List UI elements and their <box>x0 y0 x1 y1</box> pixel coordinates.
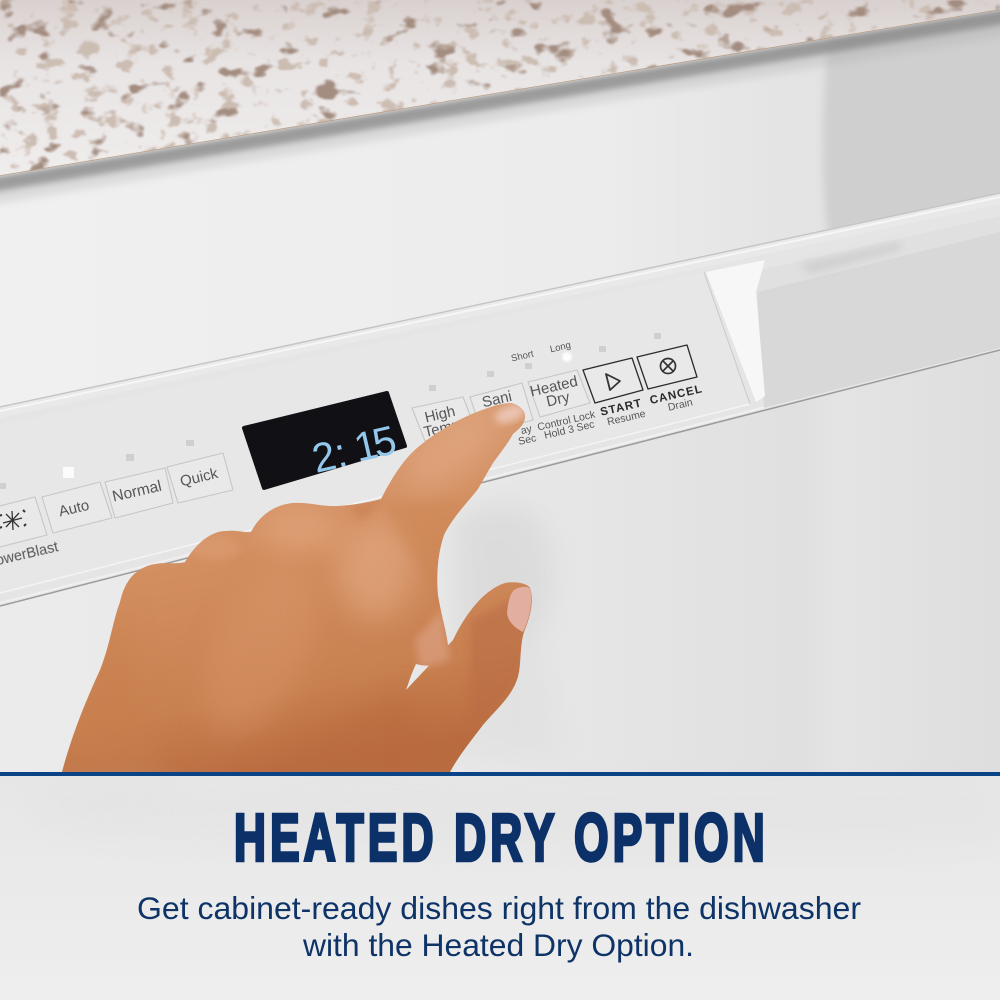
button labels <box>0 340 597 571</box>
console panel <box>0 193 1000 606</box>
band mottled texture <box>30 780 1000 850</box>
start label: START <box>599 397 643 419</box>
handle recess right of panel <box>757 226 1000 408</box>
band top rule <box>0 772 1000 776</box>
display time: 15 <box>350 417 400 471</box>
lit indicator: Long <box>562 352 572 362</box>
counter edge <box>0 10 1000 176</box>
cancel button <box>637 345 704 414</box>
button labels: Sec <box>517 432 537 448</box>
cancel label: CANCEL <box>649 383 704 407</box>
button labels: Control Lock <box>536 408 597 434</box>
button labels: Quick <box>178 465 220 490</box>
thumbnail <box>507 587 531 632</box>
button labels: ay <box>520 423 534 437</box>
upper door fascia <box>0 10 1000 407</box>
door shading and hand shadow <box>400 503 560 760</box>
button labels: Hold 3 Sec <box>543 418 596 442</box>
icon: play <box>606 374 620 390</box>
background: dishwasher front <box>0 0 1000 772</box>
resume label: Resume <box>606 408 647 428</box>
drain label: Drain <box>667 396 694 414</box>
countertop granite <box>0 0 1000 180</box>
digital display <box>244 393 405 488</box>
white wedge highlight <box>706 260 765 402</box>
button labels: Normal <box>111 478 163 506</box>
caption band <box>0 772 1000 1000</box>
description text <box>137 890 861 963</box>
button labels: Long <box>549 340 572 355</box>
granite flecks <box>0 0 1000 180</box>
hand pressing button <box>50 395 550 775</box>
display time <box>308 417 400 482</box>
button labels: Short <box>510 349 535 364</box>
button labels: Dry <box>545 389 572 411</box>
cycle buttons <box>0 370 590 550</box>
button labels: Heated <box>529 373 579 400</box>
title: HEATED DRY OPTION <box>234 801 765 876</box>
button labels: Auto <box>57 497 91 520</box>
button labels: Sani <box>480 388 514 411</box>
start button <box>583 358 647 428</box>
display time: 2: <box>308 429 351 482</box>
button labels: High <box>423 403 457 426</box>
status indicator lights <box>0 333 661 489</box>
description text: Get cabinet-ready dishes right from the dishwasher <box>137 890 861 926</box>
icon: PowerBlast spray <box>0 510 26 530</box>
control panel face <box>0 272 750 593</box>
lit indicator: Auto <box>63 467 74 478</box>
icon: cancel <box>660 358 676 374</box>
button labels: Temp <box>422 416 462 441</box>
description text: with the Heated Dry Option. <box>302 927 694 963</box>
